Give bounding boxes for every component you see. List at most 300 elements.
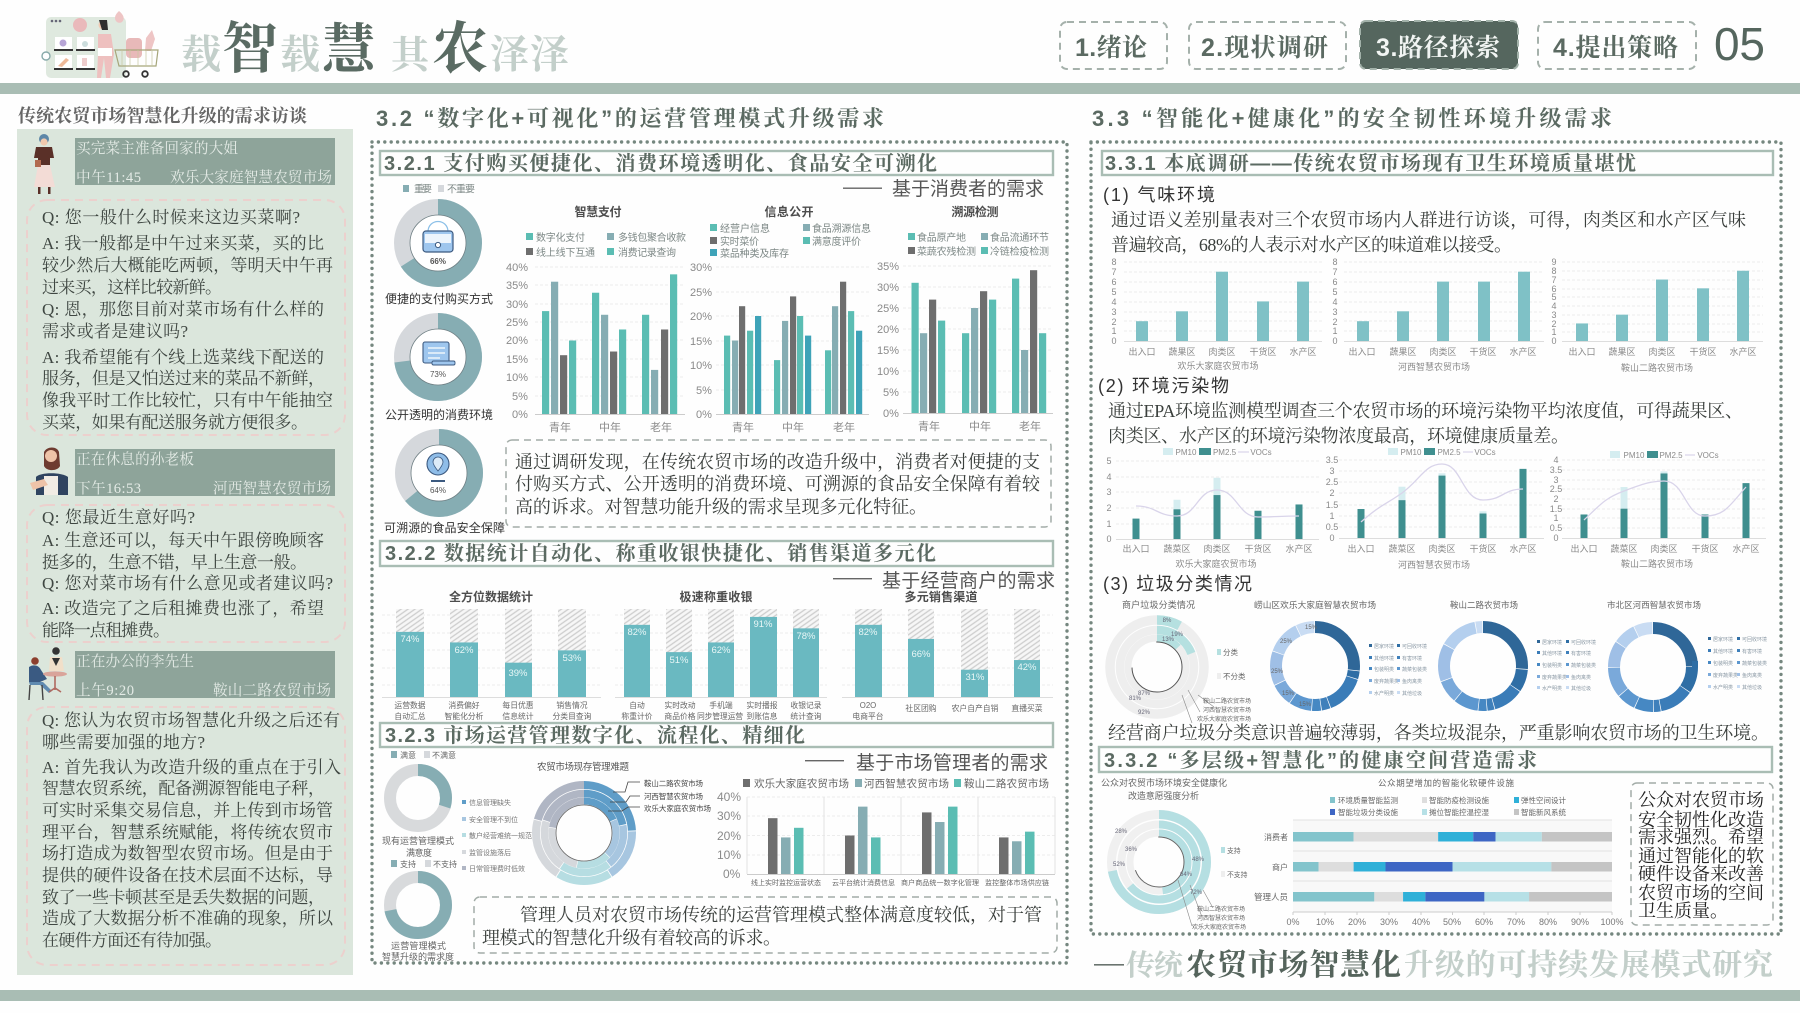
legend: 鱼肉禽类	[1742, 672, 1762, 679]
legend: 日常管理费时低效	[469, 864, 525, 873]
interviewee banner: 下午16:53	[76, 480, 141, 497]
chart: information disclosure: 20%	[690, 311, 712, 323]
chart: stacked facilities: 消费者	[1264, 832, 1288, 842]
chart: smart payment: 老年	[650, 420, 672, 434]
chart: pollutants Anshan	[1550, 451, 1766, 569]
chart: information disclosure	[690, 204, 871, 434]
chart: odour Huanle: 干货区	[1249, 346, 1277, 357]
legend: 其他环境	[1374, 655, 1394, 662]
chart: pollutants Huanle: 1	[1106, 519, 1112, 529]
dialogue box: 造成了大数据分析不准确的现象，所以	[42, 909, 334, 928]
legend: importance	[403, 182, 475, 196]
chart: stacked facilities: 0%	[1286, 917, 1300, 927]
dialogue box	[27, 707, 345, 965]
legend: satisfaction: 不满意	[432, 750, 456, 760]
chart: merchant function needs: 自动	[629, 700, 645, 710]
dialogue box: A: 我一般都是中午过来买菜，买的比	[42, 234, 324, 253]
dialogue box: 能降一点租摊费。	[42, 621, 170, 640]
legend: 居家环境	[1542, 639, 1562, 646]
legend	[1369, 643, 1427, 697]
chart: odour Anshan: 肉类区	[1648, 346, 1676, 357]
chart: merchant waste sorting: 商户垃圾分类情况	[1122, 599, 1195, 610]
chart: merchant waste sorting: 87%	[1138, 691, 1151, 697]
legend	[526, 231, 686, 259]
chart: odour Huanle: 肉类区	[1208, 346, 1236, 357]
legend: 菜蔬农残检测	[917, 245, 976, 258]
dialogue box: 哪些需要加强的地方?	[42, 733, 205, 752]
subheading: waste: (3) 垃圾分类情况	[1103, 574, 1252, 594]
chart: digital management needs: 30%	[717, 809, 741, 823]
donut: transparency	[402, 321, 474, 393]
legend: 食品原产地	[917, 231, 966, 244]
subtitle: merchants: 基于经营商户的需求	[882, 570, 1055, 592]
dialogue box: 挺多的，生意不错，早上生意一般。	[42, 553, 307, 572]
panel border	[1091, 142, 1781, 934]
legend: support	[391, 859, 457, 869]
chart: merchant function needs: 每日优惠	[502, 700, 534, 710]
chart: merchant waste sorting: 81%	[1129, 696, 1142, 702]
chart: Laoshan waste composition	[1254, 599, 1427, 708]
chart: merchant function needs: 直播买菜	[1011, 703, 1043, 713]
legend: 弹性空间设计	[1521, 795, 1566, 805]
chart: traceability testing: 中年	[969, 419, 991, 433]
chart: pollutants Anshan: 出入口	[1570, 543, 1598, 554]
donut label: 智慧升级的需求度	[382, 951, 454, 962]
chart: merchant function needs: 66%	[911, 649, 931, 660]
title: 其	[391, 35, 434, 77]
nav: 3.路径探索 active	[1360, 21, 1518, 69]
callout: manager findings	[474, 897, 1057, 953]
chart: merchant function needs: 收银记录	[790, 700, 822, 710]
legend: 信息管理缺失	[469, 798, 511, 807]
dialogue box: Q: 恩，那您目前对菜市场有什么样的	[42, 300, 324, 319]
heading 3.3.2	[1099, 747, 1772, 772]
legend: 线上线下互通	[536, 246, 595, 259]
chart: odour Hexi: 河西智慧农贸市场	[1398, 361, 1470, 372]
chart: pollutants Hexi: 出入口	[1347, 543, 1375, 554]
chart: pollutants Anshan: 3.5	[1550, 465, 1562, 475]
chart: willingness: 改造意愿强度分析	[1128, 790, 1199, 801]
legend: satisfaction: 满意	[400, 750, 416, 760]
chart: Laoshan waste composition: 崂山区欢乐大家庭智慧农贸市场	[1254, 599, 1376, 610]
title: 农	[431, 19, 488, 81]
chart: willingness: 36%	[1125, 847, 1138, 853]
chart: odour Huanle: 6	[1111, 277, 1117, 287]
chart: odour Anshan: 7	[1551, 275, 1557, 285]
interviewee banner	[75, 449, 335, 497]
legend: 河西智慧农贸市场	[864, 777, 949, 790]
nav: 4.提出策略	[1538, 22, 1696, 69]
dialogue box	[27, 505, 345, 642]
chart: stacked facilities: 90%	[1571, 917, 1589, 927]
chart: odour Anshan: 2	[1551, 319, 1557, 329]
callout: public demand: 通过智能化的软	[1638, 846, 1764, 866]
legend: support: 不支持	[433, 859, 457, 869]
chart: traceability testing: 5%	[883, 387, 899, 399]
text: odour	[1111, 210, 1746, 255]
chart: merchant function needs: 社区团购	[905, 703, 937, 713]
chart: merchant function needs: 91%	[753, 619, 773, 630]
chart: odour Huanle: 8	[1111, 257, 1117, 267]
chart: odour Hexi: 0	[1332, 336, 1338, 346]
legend: 水产明类	[1542, 685, 1562, 692]
chart: odour Hexi	[1332, 257, 1544, 372]
chart: merchant function needs: 62%	[454, 645, 474, 656]
callout: manager findings: 管理人员对农贸市场传统的运营管理模式整体满意度较低，对于管	[520, 905, 1042, 925]
callout: consumer findings	[506, 440, 1051, 527]
dialogue box: 可实时采集交易信息，并上传到市场管	[42, 801, 333, 820]
legend: 有害环境	[1742, 648, 1762, 655]
chart: odour Huanle: 5	[1111, 287, 1117, 297]
chart: traceability testing: 35%	[877, 261, 899, 273]
chart: pollutants Hexi: 2	[1329, 488, 1335, 498]
chart: pollutants Anshan: 3	[1553, 475, 1559, 485]
chart: willingness: 公众对农贸市场环境安全健康化	[1101, 777, 1227, 788]
chart: merchant function needs: 同步管理运营	[697, 711, 743, 721]
footer title	[1094, 949, 1773, 982]
chart: smart payment: 智慧支付	[574, 204, 622, 219]
dialogue box: 服务，但是又怕送过来的菜品不新鲜，	[42, 369, 325, 388]
legend: 智能防疫检测设施	[1429, 795, 1489, 805]
chart: smart payment: 35%	[506, 280, 528, 292]
callout: public demand: 硬件设备来改善	[1638, 864, 1764, 884]
chart: willingness: 28%	[1115, 829, 1128, 835]
subtitle: managers: 基于市场管理者的需求	[856, 752, 1048, 774]
icon: ledger	[423, 342, 455, 365]
chart: pollutants Huanle: VOCs	[1250, 448, 1272, 457]
dialogue box: 提供的硬件设备在技术层面不达标，导	[42, 866, 333, 885]
icon: woman	[34, 134, 55, 194]
chart: information disclosure: 信息公开	[764, 204, 814, 219]
chart: willingness: 52%	[1113, 862, 1126, 868]
chart: odour Anshan: 干货区	[1689, 346, 1717, 357]
nav: 1.绪论: 1.绪论	[1075, 34, 1147, 62]
chart: smart payment: 5%	[512, 391, 528, 403]
interviewee banner: 正在办公的李先生	[76, 652, 194, 670]
chart: Laoshan waste composition: 25%	[1271, 669, 1284, 675]
chart: pollutants Huanle: 蔬菜区	[1163, 543, 1191, 554]
chart: pollutants Hexi: 0.5	[1326, 522, 1338, 532]
legend: 水产明类	[1374, 690, 1394, 697]
legend: 有害环境	[1571, 650, 1591, 657]
chart: pollutants Anshan: 1.5	[1550, 504, 1562, 514]
chart: smart payment: 青年	[549, 420, 571, 434]
chart: traceability testing: 25%	[877, 303, 899, 315]
chart: merchant function needs: 智能化分析	[445, 711, 484, 721]
chart: traceability testing: 青年	[918, 419, 940, 433]
donut label	[382, 835, 454, 858]
callout: public demand: 公众对农贸市场	[1638, 790, 1764, 810]
title	[181, 19, 569, 81]
chart: pollutants Huanle: 水产区	[1285, 543, 1313, 554]
chart: information disclosure: 15%	[690, 336, 712, 348]
legend: importance: 重要	[414, 182, 432, 196]
chart: merchant function needs: 62%	[711, 645, 731, 656]
chart: pollutants Huanle: 干货区	[1244, 543, 1272, 554]
legend	[1708, 636, 1767, 691]
chart: odour Anshan: 0	[1551, 336, 1557, 346]
chart: traceability testing: 溯源检测	[952, 204, 998, 219]
chart: odour Anshan: 5	[1551, 292, 1557, 302]
panel: section 3.2	[372, 142, 1067, 963]
icon: wallet	[423, 222, 453, 252]
chart: merchant function needs: 农户自产自销	[952, 703, 999, 713]
legend: 废弃蔬果类	[1542, 674, 1567, 681]
donut label: 公开透明的消费环境	[385, 407, 493, 422]
chart: stacked facilities: 40%	[1412, 917, 1430, 927]
chart: merchant function needs: 信息统计	[502, 711, 534, 721]
chart: odour Anshan: 蔬果区	[1608, 346, 1636, 357]
legend: 消费记录查询	[618, 246, 676, 259]
footer title: 传统	[1126, 949, 1185, 982]
chart: stacked facilities: 20%	[1348, 917, 1366, 927]
dialogue box: 需求或者是建议吗?	[42, 322, 188, 341]
chart: management difficulties: 欢乐大家庭农贸市场	[644, 803, 712, 813]
callout: manager findings: 理模式的智慧化升级有着较高的诉求。	[482, 928, 781, 948]
donut: traceability: 64%	[430, 486, 446, 495]
donut: traceability	[403, 437, 475, 509]
legend: 菜品种类及库存	[720, 247, 789, 260]
chart: merchant waste sorting: 8%	[1163, 618, 1172, 624]
chart: odour Anshan: 1	[1551, 327, 1557, 337]
interviewee banner: 中午11:45	[76, 169, 141, 186]
legend: 安全管理不到位	[469, 815, 518, 824]
chart: traceability testing: 20%	[877, 324, 899, 336]
dialogue box: A: 首先我认为改造升级的重点在于引入	[42, 758, 341, 777]
chart: merchant waste sorting: 鞍山二路农贸市场	[1203, 697, 1251, 705]
chart: merchant function needs: 电商平台	[852, 711, 884, 721]
interviewee banner: 河西智慧农贸市场	[213, 479, 331, 497]
subtitle: consumers: 基于消费者的需求	[892, 178, 1044, 200]
chart: merchant function needs: 多元销售渠道	[904, 589, 978, 604]
chart: pollutants Anshan: 水产区	[1732, 543, 1760, 554]
interviewee banner: 欢乐大家庭智慧农贸市场	[170, 168, 332, 186]
chart: odour Huanle: 出入口	[1128, 346, 1156, 357]
chart: Shibei waste composition	[1607, 600, 1767, 706]
chart: information disclosure: 25%	[690, 287, 712, 299]
interviewee banner: 上午9:20	[76, 682, 134, 699]
callout: consumer findings: 通过调研发现，在传统农贸市场的改造升级中，消费者对便捷的支	[515, 452, 1040, 472]
chart: merchant function needs: 称重计价	[621, 711, 653, 721]
chart: stacked facilities: 60%	[1475, 917, 1493, 927]
nav: 1.绪论	[1060, 22, 1167, 69]
donut label: 满意度	[406, 847, 432, 858]
donut: support	[390, 877, 446, 933]
interviewee banner: 鞍山二路农贸市场	[213, 682, 331, 699]
legend: 废弃蔬果类	[1713, 672, 1738, 679]
chart: odour Huanle: 1	[1111, 326, 1117, 336]
callout: public demand: 卫生质量。	[1638, 901, 1728, 921]
text: pollutants	[1108, 401, 1743, 446]
chart: pollutants Huanle: 欢乐大家庭农贸市场	[1175, 558, 1257, 569]
chart: merchant waste sorting: 92%	[1138, 710, 1151, 716]
dialogue box: 较少然后大概能吃两顿，等明天中午再	[42, 255, 333, 275]
chart: smart payment: 40%	[506, 262, 528, 274]
chart: smart payment: 25%	[506, 317, 528, 329]
legend: 可回收环境	[1742, 636, 1767, 643]
dialogue box: A: 我希望能有个线上选菜线下配送的	[42, 348, 324, 367]
chart: digital management needs: 20%	[717, 829, 741, 843]
heading 3.3: 3.3 “智能化+健康化”的安全韧性环境升级需求	[1092, 106, 1612, 131]
dialogue box: Q: 您认为农贸市场智慧化升级之后还有	[42, 711, 340, 730]
chart: odour Hexi: 干货区	[1469, 346, 1497, 357]
chart: merchant function needs: 39%	[508, 668, 528, 679]
chart: odour Huanle: 7	[1111, 267, 1117, 277]
chart: odour Anshan: 水产区	[1729, 346, 1757, 357]
dialogue box: Q: 您最近生意好吗?	[42, 508, 195, 527]
chart: smart payment: 30%	[506, 299, 528, 311]
chart: merchant function needs: 实时播报	[746, 700, 778, 710]
chart: traceability testing: 0%	[883, 408, 899, 420]
chart: pollutants Hexi: 0	[1329, 533, 1335, 543]
callout: consumer findings: 付购买方式、公开透明的消费环境、可溯源的食品安全保障有着较	[515, 474, 1041, 494]
chart: pollutants Huanle: PM10	[1176, 448, 1197, 457]
legend: 废弃蔬果类	[1374, 678, 1399, 685]
legend	[908, 231, 1049, 258]
chart: pollutants Anshan: 鞍山二路农贸市场	[1621, 558, 1693, 569]
title: 慧	[322, 20, 378, 80]
chart: merchant waste sorting: 13%	[1162, 637, 1175, 643]
page number: 05	[1714, 18, 1765, 70]
chart: merchant function needs: 全方位数据统计	[449, 589, 533, 604]
chart: odour Huanle: 蔬果区	[1168, 346, 1196, 357]
chart: stacked facilities: 100%	[1600, 917, 1624, 927]
chart: management difficulties: 农贸市场现存管理难题	[537, 761, 629, 773]
chart: pollutants Huanle: 0	[1106, 534, 1112, 544]
legend: 其他垃圾	[1402, 690, 1422, 697]
chart: stacked facilities: 80%	[1539, 917, 1557, 927]
donut: payment: 66%	[430, 257, 446, 266]
chart: merchant waste sorting: 不分类	[1223, 671, 1246, 681]
subheading: pollutants: (2) 环境污染物	[1098, 376, 1229, 396]
donut: payment	[402, 207, 474, 279]
chart: willingness: 河西智慧农贸市场	[1197, 914, 1245, 922]
chart: pollutants Anshan: 肉类区	[1650, 543, 1678, 554]
legend: 蔬菜包装类	[1742, 660, 1767, 667]
legend: 鱼肉禽类	[1402, 678, 1422, 685]
donut: transparency: 73%	[430, 370, 446, 379]
chart: pollutants Anshan: 蔬菜区	[1610, 543, 1638, 554]
chart: willingness: 48%	[1192, 857, 1205, 863]
chart: information disclosure: 5%	[696, 385, 712, 397]
panel border	[372, 142, 1067, 963]
legend	[1330, 795, 1566, 817]
chart: Laoshan waste composition: 15%	[1299, 702, 1312, 708]
header band	[0, 83, 1800, 94]
chart: merchant waste sorting	[1110, 599, 1251, 723]
legend: 水产明类	[1713, 684, 1733, 691]
interviewee banner	[75, 138, 335, 186]
chart: pollutants Anshan: 0.5	[1550, 523, 1562, 533]
legend: 经营户信息	[720, 222, 770, 235]
chart: pollutants Anshan: 2	[1553, 494, 1559, 504]
chart: traceability testing: 30%	[877, 282, 899, 294]
legend: 蔬菜包装类	[1402, 666, 1427, 673]
dialogue box: 智慧农贸系统，配备溯源智能电子秤，	[42, 779, 325, 798]
chart: odour Anshan: 8	[1551, 266, 1557, 276]
chart: management difficulties: 河西智慧农贸市场	[644, 791, 704, 801]
interviewee banner	[75, 651, 335, 699]
chart: merchant function needs: 消费偏好	[448, 700, 480, 710]
chart: pollutants Huanle: PM2.5	[1213, 448, 1237, 457]
icon: two people at table	[29, 647, 67, 700]
chart: stacked facilities: 50%	[1443, 917, 1461, 927]
legend: 有害环境	[1402, 655, 1422, 662]
chart: digital management needs	[717, 777, 1055, 887]
legend: 包装明类	[1542, 662, 1562, 669]
chart: pollutants Huanle: 出入口	[1122, 543, 1150, 554]
footer band	[0, 990, 1800, 1001]
interviewee banner: 正在休息的孙老板	[76, 450, 194, 468]
chart: stacked facilities: 商户	[1272, 862, 1288, 872]
chart: stacked facilities: 10%	[1316, 917, 1334, 927]
legend: satisfaction	[391, 750, 456, 760]
chart: pollutants Anshan: PM2.5	[1659, 451, 1683, 460]
dialogue box: 致了一些卡顿甚至是丢失数据的问题，	[42, 887, 325, 907]
legend: 多钱包聚合收款	[618, 231, 686, 244]
donut label: 便捷的支付购买方式	[385, 291, 493, 306]
chart: pollutants Anshan: 干货区	[1691, 543, 1719, 554]
chart: merchant function needs: 销售情况	[556, 700, 588, 710]
chart: pollutants Anshan: 2.5	[1550, 484, 1562, 494]
legend: 环境质量智能监测	[1338, 795, 1398, 805]
chart: smart payment: 15%	[506, 354, 528, 366]
chart: merchant function needs: 运营数据	[394, 700, 426, 710]
interviewee: merchant	[27, 448, 345, 642]
chart: management difficulties: 鞍山二路农贸市场	[644, 778, 704, 788]
legend: 摊位智能控温控湿	[1429, 807, 1489, 817]
chart: pollutants Hexi: 3	[1329, 466, 1335, 476]
chart: pollutants Anshan: VOCs	[1697, 451, 1719, 460]
heading 3.2.3	[380, 723, 1053, 747]
legend: 食品流通环节	[990, 231, 1049, 244]
chart: stacked facilities: 管理人员	[1254, 892, 1288, 902]
chart: odour Hexi: 5	[1332, 287, 1338, 297]
legend: 监管设施落后	[469, 848, 511, 857]
chart: odour Hexi: 肉类区	[1429, 346, 1457, 357]
legend	[743, 777, 1049, 790]
legend: 数字化支付	[536, 231, 585, 244]
chart: traceability testing	[877, 204, 1053, 433]
chart: traceability testing: 老年	[1019, 419, 1041, 433]
legend: 包装明类	[1713, 660, 1733, 667]
chart: willingness: 鞍山二路农贸市场	[1197, 905, 1245, 913]
legend: 鱼肉禽类	[1571, 674, 1591, 681]
chart: odour Huanle: 2	[1111, 317, 1117, 327]
dialogue box: 理平台，智慧系统赋能，将传统农贸市	[42, 823, 333, 842]
chart: merchant function needs	[382, 589, 1053, 721]
legend: 冷链检疫检测	[990, 245, 1049, 258]
legend: 欢乐大家庭农贸市场	[754, 777, 849, 790]
legend: 蔬菜包装类	[1571, 662, 1596, 669]
dialogue box: 像我平时工作比较忙，只有中午能抽空	[42, 391, 333, 410]
legend: support: 支持	[400, 859, 416, 869]
chart: pollutants Hexi: 肉类区	[1428, 543, 1456, 554]
dialogue box	[27, 200, 345, 435]
chart: merchant function needs: 31%	[965, 672, 985, 683]
chart: smart payment	[506, 204, 686, 434]
chart: pollutants Hexi: PM10	[1401, 448, 1422, 457]
legend: 满意度评价	[812, 235, 861, 248]
subheading: odour: (1) 气味环境	[1103, 185, 1215, 205]
chart: merchant function needs: 78%	[796, 631, 816, 642]
chart: odour Hexi: 8	[1332, 257, 1338, 267]
chart: odour Hexi: 3	[1332, 307, 1338, 317]
chart: Laoshan waste composition: 25%	[1280, 639, 1293, 645]
chart: Laoshan waste composition: 15%	[1282, 691, 1295, 697]
legend: 其他垃圾	[1571, 685, 1591, 692]
callout: public demand: 农贸市场的空间	[1638, 883, 1764, 903]
